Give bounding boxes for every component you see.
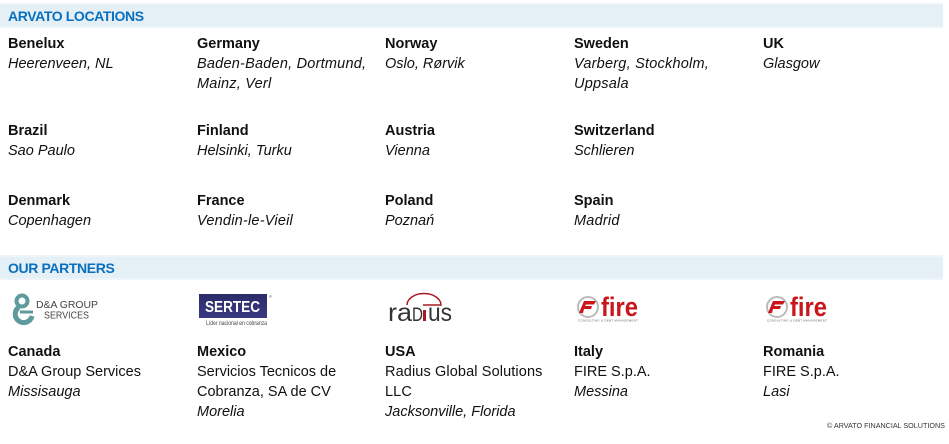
partner: Romania: FIRE S.p.A.	[763, 364, 840, 380]
location: Poland: Poznań	[385, 213, 434, 229]
logo: Sertec: SERTEC	[205, 299, 260, 316]
logo: Sertec	[199, 294, 272, 327]
partner: Romania: Romania	[763, 344, 824, 360]
partner: Romania: Lasi	[763, 384, 790, 400]
logo: Fire (Italy)	[577, 294, 638, 322]
partner: USA: Radius Global Solutions	[385, 364, 543, 380]
location: Sweden: Sweden	[574, 36, 629, 52]
location: Brazil	[8, 123, 75, 159]
logo: D&A Group Services: SERVICES	[44, 310, 89, 322]
partner: Mexico: Mexico	[197, 344, 246, 360]
logo: D&A Group Services	[12, 294, 98, 326]
partner: Italy: FIRE S.p.A.	[574, 364, 651, 380]
partner: Canada	[8, 344, 141, 400]
location: UK: UK	[763, 36, 784, 52]
location: Brazil: Brazil	[8, 123, 48, 139]
partner: Italy: Italy	[574, 344, 603, 360]
heading: Arvato locations	[0, 3, 943, 28]
location: Austria: Vienna	[385, 143, 430, 159]
partner: Mexico: Servicios Tecnicos de	[197, 364, 336, 380]
location: France: Vendin-le-Vieil	[197, 213, 293, 229]
location: Spain	[574, 193, 620, 229]
location: Poland	[385, 193, 434, 229]
location: Switzerland	[574, 123, 655, 159]
location: Denmark: Denmark	[8, 193, 70, 209]
location: UK	[763, 36, 820, 72]
location: Austria: Austria	[385, 123, 435, 139]
location: France	[197, 193, 294, 229]
logo: Radius	[388, 292, 452, 324]
location: Norway: Norway	[385, 36, 437, 52]
heading: Our partners: OUR PARTNERS	[8, 260, 114, 276]
location: Denmark: Copenhagen	[8, 213, 91, 229]
location: Norway: Oslo, Rørvik	[385, 56, 465, 72]
partner: Mexico: Cobranza, SA de CV	[197, 384, 331, 400]
partner: Canada: Canada	[8, 344, 60, 360]
location: Benelux	[8, 36, 114, 72]
location: Norway	[385, 36, 466, 72]
location: UK: Glasgow	[763, 56, 819, 72]
partner: USA	[385, 344, 543, 420]
location: Sweden	[574, 36, 709, 92]
location: Germany	[197, 36, 366, 92]
heading: Our partners	[0, 255, 943, 280]
location: Benelux: Heerenveen, NL	[8, 56, 114, 72]
partner: Italy: Messina	[574, 384, 628, 400]
location: Brazil: Sao Paulo	[8, 143, 75, 159]
partner: USA: Jacksonville, Florida	[385, 404, 516, 420]
logo: Sertec: ®	[269, 294, 272, 299]
location: Spain: Madrid	[574, 213, 620, 229]
partner: Mexico	[197, 344, 336, 420]
logo: D&A Group Services: D&A GROUP	[36, 299, 98, 311]
location: Sweden: Uppsala	[574, 76, 629, 92]
logo: Fire (Italy): CONSULTING & DEBT MANAGEMENT	[578, 318, 638, 322]
partner: Romania	[763, 344, 840, 400]
location: Switzerland: Switzerland	[574, 123, 655, 139]
location: Germany: Germany	[197, 36, 260, 52]
partner: Canada: Missisauga	[8, 384, 81, 400]
location: Finland	[197, 123, 292, 159]
partner: Mexico: Morelia	[197, 404, 245, 420]
location: Germany: Mainz, Verl	[197, 76, 271, 92]
location: Benelux: Benelux	[8, 36, 64, 52]
location: Poland: Poland	[385, 193, 433, 209]
location: Switzerland: Schlieren	[574, 143, 634, 159]
location: Germany: Baden-Baden, Dortmund,	[197, 56, 366, 72]
copyright: © ARVATO FINANCIAL SOLUTIONS	[827, 421, 945, 430]
logo: Fire (Romania): CONSULTING & DEBT MANAGEMENT	[767, 318, 827, 322]
location: Finland: Finland	[197, 123, 249, 139]
partner: USA: LLC	[385, 384, 412, 400]
partner: Canada: D&A Group Services	[8, 364, 141, 380]
logo: Fire (Romania)	[766, 294, 827, 322]
partner: Italy	[574, 344, 651, 400]
location: Austria	[385, 123, 436, 159]
partner: USA: USA	[385, 344, 416, 360]
location: Spain: Spain	[574, 193, 613, 209]
location: Finland: Helsinki, Turku	[197, 143, 292, 159]
location: France: France	[197, 193, 245, 209]
heading: Arvato locations: ARVATO LOCATIONS	[8, 8, 144, 24]
location: Sweden: Varberg, Stockholm,	[574, 56, 709, 72]
location: Denmark	[8, 193, 91, 229]
